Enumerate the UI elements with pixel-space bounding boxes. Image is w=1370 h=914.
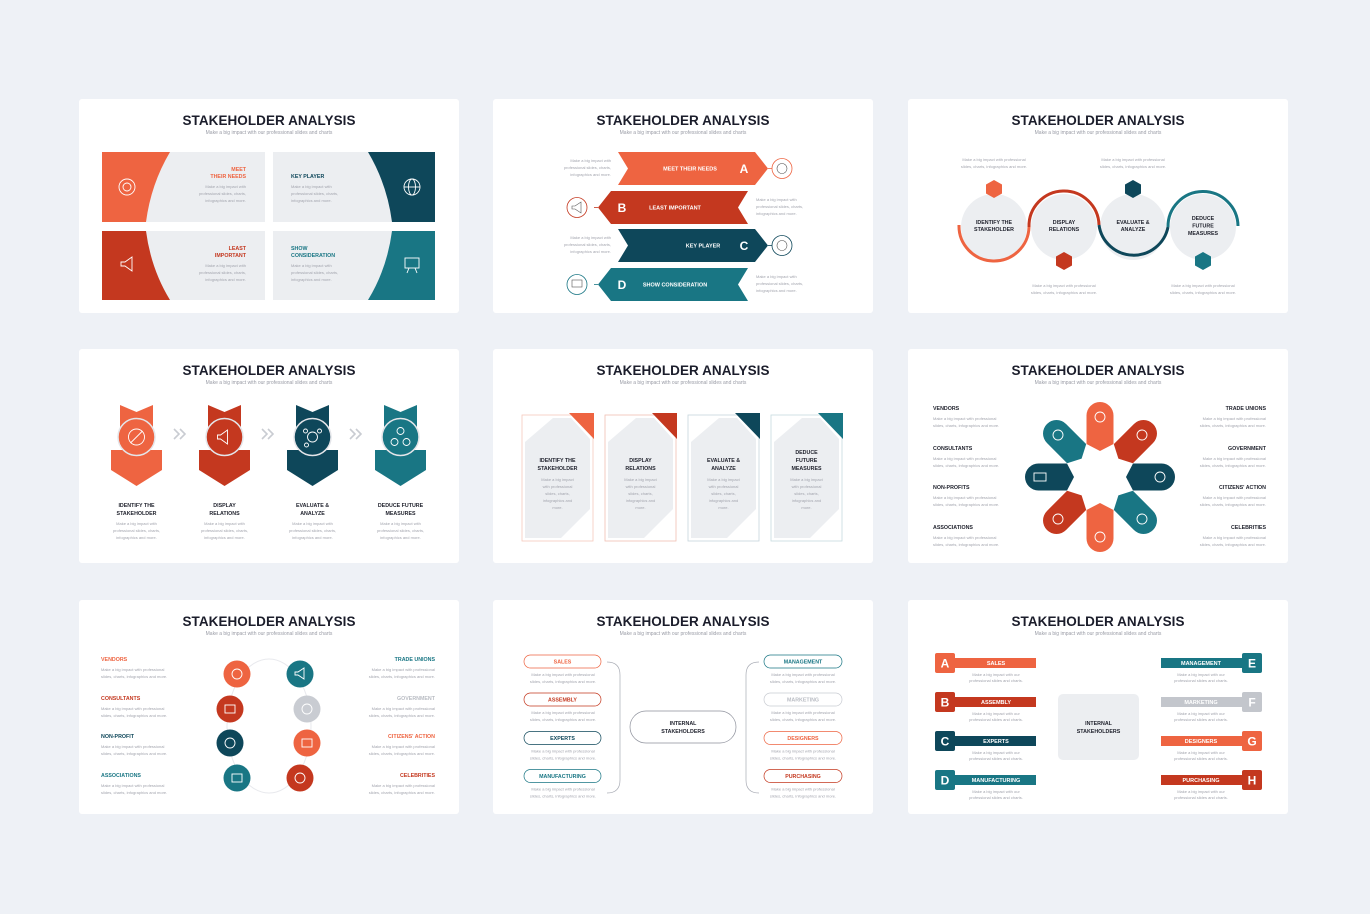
subtitle: Make a big impact with our professional slides and charts	[1035, 631, 1162, 637]
band B: Make a big impact with	[756, 197, 797, 202]
right pills: DESIGNERS	[787, 736, 819, 742]
right bars: professional slides and charts.	[1174, 795, 1228, 800]
wave diagram: DEDUCE	[1192, 216, 1215, 222]
banner 4: MEASURES	[385, 511, 416, 517]
banner 1: infographics and more.	[116, 535, 157, 540]
right labels	[1200, 406, 1267, 547]
left labels: NON-PROFITS	[933, 485, 970, 491]
left bars: B	[941, 696, 950, 710]
banner 2: infographics and more.	[204, 535, 245, 540]
slide 3: wave circles	[908, 99, 1288, 313]
left bars: MANUFACTURING	[972, 778, 1020, 784]
left bars: ASSEMBLY	[981, 700, 1011, 706]
left bars: Make a big impact with our	[972, 750, 1020, 755]
band C: professional slides, charts,	[564, 242, 611, 247]
left pills: slides, charts, infographics and more.	[530, 717, 596, 722]
right bars: DESIGNERS	[1185, 739, 1218, 745]
banner 3: Make a big impact with	[292, 521, 333, 526]
left labels: VENDORS	[101, 657, 128, 663]
left pills: Make a big impact with professional	[531, 710, 595, 715]
band A: professional slides, charts,	[564, 165, 611, 170]
subtitle: Make a big impact with our professional slides and charts	[206, 380, 333, 386]
right labels: slides, charts, infographics and more.	[369, 751, 435, 756]
banner 1	[111, 405, 162, 540]
band B: professional slides, charts,	[756, 204, 803, 209]
band C	[564, 229, 792, 262]
card 3: slides, charts,	[711, 491, 736, 496]
left pills: slides, charts, infographics and more.	[530, 794, 596, 798]
right pills	[764, 655, 842, 798]
card 3	[688, 413, 760, 541]
band B: LEAST IMPORTANT	[649, 206, 702, 212]
left bars: Make a big impact with our	[972, 789, 1020, 794]
right labels: Make a big impact with professional	[1203, 456, 1266, 461]
card 1: Make a big impact	[541, 477, 575, 482]
right labels: slides, charts, infographics and more.	[1200, 542, 1266, 547]
left labels: Make a big impact with professional	[101, 667, 164, 672]
card 1: more.	[552, 505, 563, 510]
right bars: G	[1247, 734, 1257, 748]
slide 1: quadrant matrix	[79, 99, 459, 313]
right pills: Make a big impact with professional	[771, 748, 835, 754]
descriptions: Make a big impact with professional	[1032, 283, 1096, 288]
flower	[1025, 402, 1175, 552]
right pills: slides, charts, infographics and more.	[770, 679, 836, 684]
wave diagram: MEASURES	[1188, 231, 1218, 237]
title: STAKEHOLDER ANALYSIS	[596, 363, 770, 378]
right labels: slides, charts, infographics and more.	[1200, 502, 1266, 507]
left labels	[933, 406, 999, 547]
wave diagram: IDENTIFY THE	[976, 220, 1013, 226]
card 4: DEDUCE	[795, 450, 818, 456]
card 3: EVALUATE &	[707, 458, 740, 464]
descriptions: Make a big impact with professional	[962, 157, 1026, 162]
subtitle: Make a big impact with our professional slides and charts	[620, 631, 747, 637]
card 1: infographics and	[543, 498, 572, 503]
card 1: with professional	[543, 484, 573, 489]
card 3: Make a big impact	[707, 477, 741, 482]
wave diagram: DISPLAY	[1053, 220, 1076, 226]
left labels	[101, 657, 167, 795]
panel: key player: Make a big impact with	[291, 184, 332, 189]
left labels: Make a big impact with professional	[101, 744, 164, 749]
banner 4	[375, 405, 426, 540]
band D: infographics and more.	[756, 288, 797, 293]
banner 3: EVALUATE &	[296, 503, 329, 509]
banner 1: professional slides, charts,	[113, 528, 160, 533]
center box: STAKEHOLDERS	[1077, 729, 1121, 735]
left labels: VENDORS	[933, 406, 960, 412]
band D	[567, 268, 803, 301]
wave diagram: FUTURE	[1192, 224, 1214, 230]
right labels: GOVERNMENT	[1228, 446, 1267, 452]
left labels: slides, charts, infographics and more.	[101, 751, 167, 756]
panel: show consideration: CONSIDERATION	[291, 253, 335, 259]
banner 1: STAKEHOLDER	[117, 511, 157, 517]
left pills: SALES	[554, 660, 572, 666]
panel: meet their needs: Make a big impact with	[205, 184, 246, 189]
banner 2: DISPLAY	[213, 503, 236, 509]
band A: infographics and more.	[570, 172, 611, 177]
right labels: TRADE UNIONS	[1226, 406, 1266, 412]
banner 3: infographics and more.	[292, 535, 333, 540]
left pills: Make a big impact with professional	[531, 672, 595, 677]
right pills: Make a big impact with professional	[771, 786, 835, 792]
band D: Make a big impact with	[756, 274, 797, 279]
card 4: more.	[801, 505, 812, 510]
left labels: slides, charts, infographics and more.	[933, 423, 999, 428]
card 4: infographics and	[792, 498, 821, 503]
card 3: infographics and	[709, 498, 738, 503]
title: STAKEHOLDER ANALYSIS	[596, 614, 770, 629]
right bars: H	[1248, 774, 1256, 788]
card 4: FUTURE	[796, 458, 818, 464]
banner 4: infographics and more.	[380, 535, 421, 540]
band C: C	[740, 239, 749, 253]
banner 2: RELATIONS	[209, 511, 240, 517]
left labels: NON-PROFIT	[101, 734, 135, 740]
right bars: professional slides and charts.	[1174, 756, 1228, 761]
banner 4: professional slides, charts,	[377, 528, 424, 533]
panel: show consideration: SHOW	[291, 246, 307, 252]
left labels: CONSULTANTS	[933, 446, 973, 452]
descriptions: slides, charts, infographics and more.	[1170, 290, 1236, 295]
left pills: slides, charts, infographics and more.	[530, 756, 596, 760]
wave diagram	[959, 180, 1238, 270]
descriptions: Make a big impact with professional	[1101, 157, 1165, 162]
band A: A	[740, 162, 749, 176]
panel: show consideration: Make a big impact with	[291, 263, 332, 268]
left pills: ASSEMBLY	[548, 698, 577, 704]
right pills: MARKETING	[787, 698, 819, 704]
subtitle: Make a big impact with our professional slides and charts	[1035, 130, 1162, 136]
center box: INTERNAL	[1085, 721, 1113, 727]
panel: show consideration: professional slides, charts,	[291, 270, 338, 275]
left labels: Make a big impact with professional	[933, 495, 996, 500]
right labels: TRADE UNIONS	[395, 657, 435, 663]
card 4	[771, 413, 843, 541]
right bars: PURCHASING	[1183, 778, 1219, 784]
left labels: slides, charts, infographics and more.	[101, 790, 167, 795]
card 2: with professional	[626, 484, 656, 489]
panel: least important: IMPORTANT	[215, 253, 247, 259]
card 4: MEASURES	[791, 466, 822, 472]
panel: least important: Make a big impact with	[205, 263, 246, 268]
right labels: slides, charts, infographics and more.	[369, 713, 435, 718]
title: STAKEHOLDER ANALYSIS	[1012, 614, 1184, 629]
banner 2	[199, 405, 250, 540]
card 2: Make a big impact	[624, 477, 658, 482]
band D: SHOW CONSIDERATION	[643, 282, 707, 288]
subtitle: Make a big impact with our professional slides and charts	[620, 130, 747, 136]
right bars	[1161, 653, 1262, 800]
slide 5: cards	[493, 349, 873, 563]
left bars: professional slides and charts.	[969, 717, 1023, 722]
right pills: Make a big impact with professional	[771, 672, 835, 677]
left labels: Make a big impact with professional	[101, 706, 164, 711]
left bars: professional slides and charts.	[969, 678, 1023, 683]
subtitle: Make a big impact with our professional slides and charts	[206, 631, 333, 637]
left pills	[524, 655, 601, 798]
slide 2: arrow bands A-D	[493, 99, 873, 313]
slide 9: letter bars	[908, 600, 1288, 814]
subtitle: Make a big impact with our professional slides and charts	[1035, 380, 1162, 386]
card 2	[605, 413, 677, 541]
band C: Make a big impact with	[570, 235, 611, 240]
card 2: infographics and	[626, 498, 655, 503]
banner 2: Make a big impact with	[204, 521, 245, 526]
left pills: MANUFACTURING	[539, 774, 586, 780]
right labels: slides, charts, infographics and more.	[1200, 423, 1266, 428]
center box	[1058, 694, 1139, 760]
right bars: professional slides and charts.	[1174, 678, 1228, 683]
title: STAKEHOLDER ANALYSIS	[182, 614, 356, 629]
right labels: Make a big impact with professional	[372, 706, 435, 711]
panel: key player: professional slides, charts,	[291, 191, 338, 196]
band A: Make a big impact with	[570, 158, 611, 163]
card 4: Make a big impact	[790, 477, 824, 482]
descriptions: slides, charts, infographics and more.	[961, 164, 1027, 169]
right labels: Make a big impact with professional	[1203, 416, 1266, 421]
panel: meet their needs: MEET	[231, 167, 247, 173]
slide 7: circle ring	[79, 600, 459, 814]
right labels: slides, charts, infographics and more.	[369, 674, 435, 679]
banner 1: IDENTIFY THE	[118, 503, 155, 509]
panel: least important: LEAST	[229, 246, 247, 252]
card 2: DISPLAY	[629, 458, 652, 464]
panel: least important: professional slides, charts,	[199, 270, 246, 275]
left labels: ASSOCIATIONS	[933, 525, 973, 531]
right labels: Make a big impact with professional	[1203, 495, 1266, 500]
right pills: slides, charts, infographics and more.	[770, 717, 836, 722]
left bars: Make a big impact with our	[972, 711, 1020, 716]
left bars: C	[941, 734, 950, 748]
left bars: professional slides and charts.	[969, 795, 1023, 800]
right bars: Make a big impact with our	[1177, 672, 1225, 677]
card 3: more.	[718, 505, 729, 510]
card 2: RELATIONS	[625, 466, 656, 472]
left bars: A	[941, 656, 950, 670]
left labels: ASSOCIATIONS	[101, 773, 141, 779]
panel: meet their needs: infographics and more.	[205, 198, 246, 203]
right bars: Make a big impact with our	[1177, 789, 1225, 794]
card 2: more.	[635, 505, 646, 510]
left labels: Make a big impact with professional	[933, 535, 996, 540]
band C: KEY PLAYER	[686, 244, 720, 250]
title: STAKEHOLDER ANALYSIS	[1012, 363, 1184, 378]
slide 4: banner steps	[79, 349, 459, 563]
card 1: IDENTIFY THE	[539, 458, 576, 464]
band C: infographics and more.	[570, 249, 611, 254]
subtitle: Make a big impact with our professional slides and charts	[620, 380, 747, 386]
right labels: CITIZENS' ACTION	[1219, 485, 1266, 491]
card 4: with professional	[792, 484, 822, 489]
left pills: Make a big impact with professional	[531, 786, 595, 792]
band D: D	[618, 278, 627, 292]
card 3: ANALYZE	[711, 466, 736, 472]
right bars: Make a big impact with our	[1177, 750, 1225, 755]
card 1: STAKEHOLDER	[538, 466, 578, 472]
panel: least important: infographics and more.	[205, 277, 246, 282]
band B: infographics and more.	[756, 211, 797, 216]
banner 4: DEDUCE FUTURE	[378, 503, 424, 509]
card 2: slides, charts,	[628, 491, 653, 496]
right labels: CITIZENS' ACTION	[388, 734, 435, 740]
center pill: STAKEHOLDERS	[661, 729, 705, 735]
panel: meet their needs	[102, 152, 265, 222]
ring of icons	[216, 659, 320, 793]
descriptions: Make a big impact with professional	[1171, 283, 1235, 288]
left labels: Make a big impact with professional	[933, 456, 996, 461]
left labels: CONSULTANTS	[101, 696, 141, 702]
left bars	[935, 653, 1036, 800]
right labels: slides, charts, infographics and more.	[1200, 463, 1266, 468]
slide 6: petal flower	[908, 349, 1288, 563]
card 4: slides, charts,	[794, 491, 819, 496]
wave diagram: ANALYZE	[1121, 227, 1146, 233]
panel: show consideration: infographics and more.	[291, 277, 332, 282]
card 1	[522, 413, 594, 541]
right labels: CELEBRITIES	[400, 773, 435, 779]
banner 4: Make a big impact with	[380, 521, 421, 526]
panel: key player	[273, 152, 435, 222]
left pills: slides, charts, infographics and more.	[530, 679, 596, 684]
panel: least important	[102, 231, 265, 300]
left bars: D	[941, 774, 950, 788]
right labels: Make a big impact with professional	[1203, 535, 1266, 540]
left bars: EXPERTS	[983, 739, 1009, 745]
wave diagram: EVALUATE &	[1116, 220, 1150, 226]
left bars: professional slides and charts.	[969, 756, 1023, 761]
band A	[564, 152, 792, 185]
right labels: Make a big impact with professional	[372, 783, 435, 788]
brackets	[607, 662, 759, 793]
right pills: PURCHASING	[785, 774, 821, 780]
right labels: Make a big impact with professional	[372, 744, 435, 749]
descriptions: slides, charts, infographics and more.	[1100, 164, 1166, 169]
panel: key player: KEY PLAYER	[291, 174, 324, 180]
arrows	[174, 429, 361, 439]
title: STAKEHOLDER ANALYSIS	[182, 113, 356, 128]
left labels: slides, charts, infographics and more.	[101, 674, 167, 679]
panel: key player: infographics and more.	[291, 198, 332, 203]
left pills: EXPERTS	[550, 736, 575, 742]
banner 2: professional slides, charts,	[201, 528, 248, 533]
right labels: GOVERNMENT	[397, 696, 436, 702]
left bars: Make a big impact with our	[972, 672, 1020, 677]
banner 1: Make a big impact with	[116, 521, 157, 526]
right labels: slides, charts, infographics and more.	[369, 790, 435, 795]
left labels: Make a big impact with professional	[101, 783, 164, 788]
right labels: Make a big impact with professional	[372, 667, 435, 672]
card 1: slides, charts,	[545, 491, 570, 496]
wave diagram: RELATIONS	[1049, 227, 1080, 233]
left labels: slides, charts, infographics and more.	[933, 502, 999, 507]
panel: show consideration	[273, 231, 435, 300]
left labels: slides, charts, infographics and more.	[933, 463, 999, 468]
right pills: slides, charts, infographics and more.	[770, 756, 836, 760]
panel: meet their needs: professional slides, charts,	[199, 191, 246, 196]
band B	[567, 191, 803, 224]
banner 3: ANALYZE	[300, 511, 325, 517]
right bars: MANAGEMENT	[1181, 661, 1222, 667]
center pill	[630, 711, 736, 743]
band D: professional slides, charts,	[756, 281, 803, 286]
banner 3	[287, 405, 338, 540]
right bars: F	[1248, 696, 1256, 710]
descriptions: slides, charts, infographics and more.	[1031, 290, 1097, 295]
panel: meet their needs: THEIR NEEDS	[210, 174, 246, 180]
left bars: SALES	[987, 661, 1005, 667]
descriptions	[961, 157, 1236, 295]
slide 8: pill brackets	[493, 600, 873, 814]
left labels: slides, charts, infographics and more.	[933, 542, 999, 547]
title: STAKEHOLDER ANALYSIS	[1012, 113, 1184, 128]
banner 3: professional slides, charts,	[289, 528, 336, 533]
right pills: MANAGEMENT	[784, 660, 823, 666]
right pills: slides, charts, infographics and more.	[770, 794, 836, 798]
right labels: CELEBRITIES	[1231, 525, 1266, 531]
left labels: slides, charts, infographics and more.	[101, 713, 167, 718]
wave diagram: STAKEHOLDER	[974, 227, 1014, 233]
center pill: INTERNAL	[670, 721, 697, 727]
right bars: professional slides and charts.	[1174, 717, 1228, 722]
right bars: MARKETING	[1184, 700, 1218, 706]
title: STAKEHOLDER ANALYSIS	[182, 363, 356, 378]
band B: B	[618, 201, 627, 215]
right bars: Make a big impact with our	[1177, 711, 1225, 716]
subtitle: Make a big impact with our professional slides and charts	[206, 130, 333, 136]
right bars: E	[1248, 656, 1256, 670]
right pills: Make a big impact with professional	[771, 710, 835, 715]
left pills: Make a big impact with professional	[531, 748, 595, 754]
band A: MEET THEIR NEEDS	[663, 166, 717, 172]
right labels	[369, 657, 436, 795]
left labels: Make a big impact with professional	[933, 416, 996, 421]
title: STAKEHOLDER ANALYSIS	[596, 113, 770, 128]
card 3: with professional	[709, 484, 739, 489]
